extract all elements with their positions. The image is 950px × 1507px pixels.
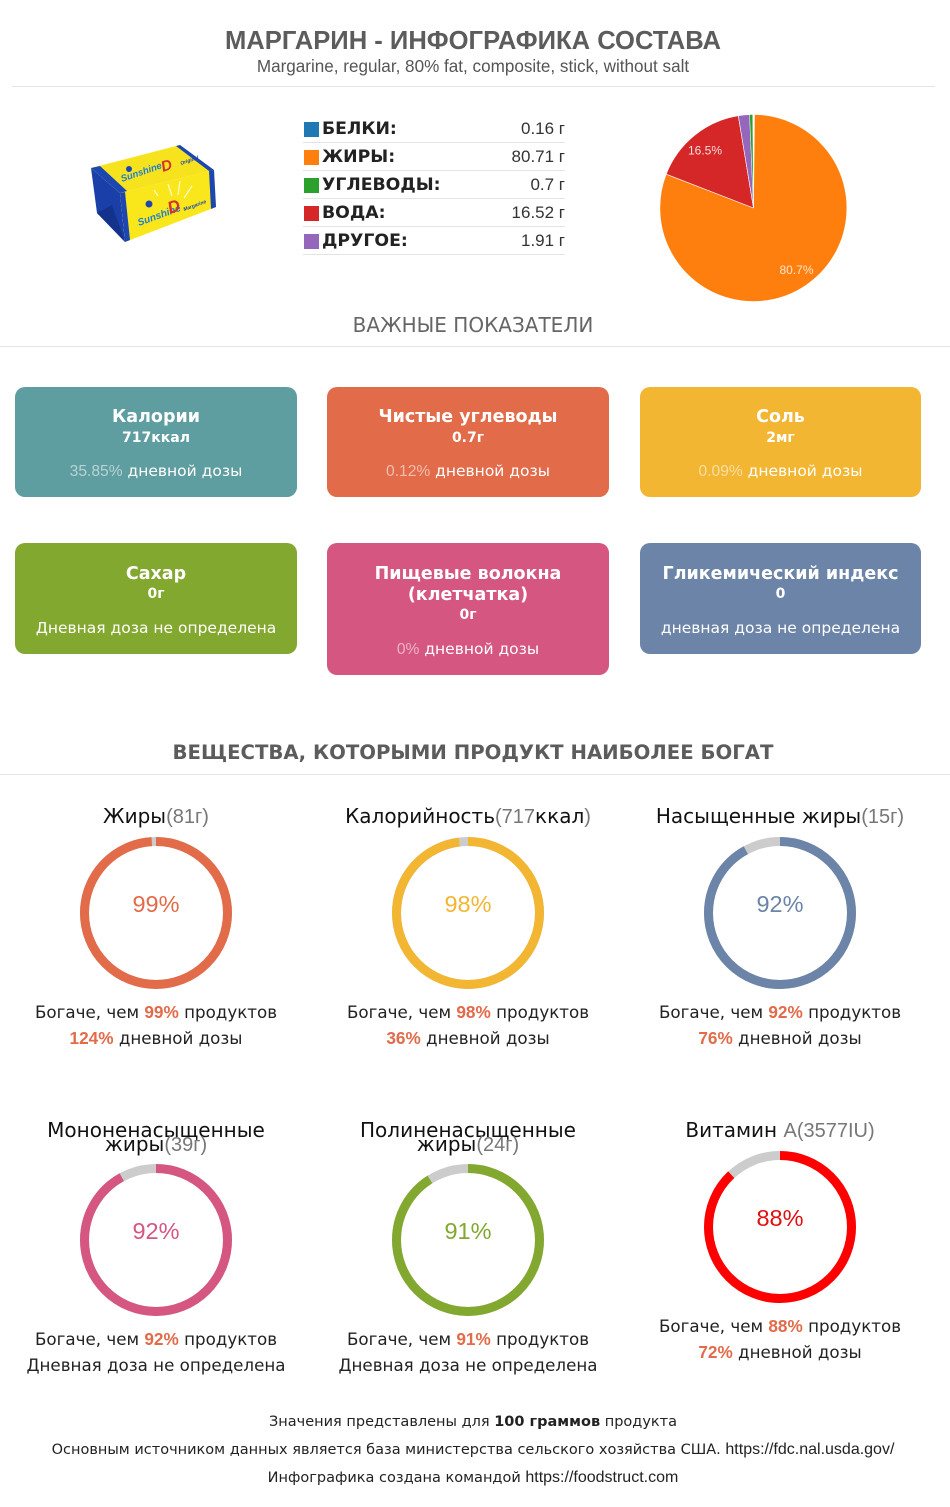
heading: Мононенасыщенные [47,1118,265,1142]
card: salt: 0.09% дневной дозы [699,462,862,480]
card: calories: Калории [112,407,200,427]
card: calories: 35.85% дневной дозы [70,462,242,480]
row: carbs: 0.7 г [530,175,565,194]
ring chart [392,837,544,989]
card: net carbs: 0.7г [452,430,484,446]
card: glycemic index [640,543,921,654]
card: fiber: Пищевые волокна [375,564,561,584]
card: fiber: 0% дневной дозы [397,640,539,658]
panel: fats [35,804,277,1048]
row: fat: ЖИРЫ: [322,147,395,167]
ring chart [704,1151,856,1303]
card: sugar: Дневная доза не определена [36,619,276,637]
footer note: credit: Инфографика создана командой https://foodstruct.com [268,1469,678,1486]
card: glycemic index: Гликемический индекс [663,564,898,584]
percent: 92% [132,1218,180,1244]
row: protein [303,115,565,143]
card: fiber: 0г [459,607,477,623]
percent: 91% [444,1218,492,1244]
percent: 88% [756,1205,804,1231]
row: water [303,199,565,227]
heading: Насыщенные жиры(15г) [656,804,904,828]
row: other [303,227,565,255]
heading: Калорийность(717ккал) [345,804,591,828]
heading: key indicators: ВАЖНЫЕ ПОКАЗАТЕЛИ [353,313,593,337]
rank: Богаче, чем 91% продуктов [347,1329,589,1349]
row: water: ВОДА: [322,203,386,223]
card: net carbs [327,387,609,497]
row: other: ДРУГОЕ: [322,231,408,251]
daily dose: 76% дневной дозы [698,1028,862,1048]
row: other: 1.91 г [521,231,565,250]
pie chart: 80.7% [779,263,814,277]
heading: richest nutrients: ВЕЩЕСТВА, КОТОРЫМИ ПРОДУКТ НАИБОЛЕЕ БОГАТ [173,741,773,764]
table: composition [303,119,565,255]
card: salt: Соль [756,407,805,427]
heading: Полиненасыщенные [360,1118,576,1142]
card: salt: 2мг [766,430,795,446]
row: water: 16.52 г [512,203,565,222]
panel: saturated fats [656,804,904,1048]
heading: жиры(39г) [105,1132,207,1156]
card: glycemic index: 0 [776,586,785,602]
icon: margarine package: Margarine [183,199,207,213]
daily dose: 72% дневной дозы [698,1342,862,1362]
row: fat [303,143,565,171]
daily dose: 124% дневной дозы [70,1028,242,1048]
card: sugar: 0г [147,586,165,602]
footer note: source: Основным источником данных является база министерства сельского хозяйства США. https://fdc.nal.usda.gov/ [52,1441,894,1458]
heading: Витамин A(3577IU) [685,1118,875,1142]
panel: monounsaturated fats [26,1118,286,1375]
card: fiber: (клетчатка) [408,585,528,605]
percent: 98% [444,891,492,917]
subtitle: Margarine, regular, 80% fat, composite, stick, without salt [257,57,689,76]
rank: Богаче, чем 92% продуктов [659,1002,901,1022]
card: sugar [15,543,297,654]
percent: 92% [756,891,804,917]
card: salt [640,387,921,497]
heading: Жиры(81г) [103,804,209,828]
daily dose: Дневная доза не определена [338,1355,598,1375]
ring chart [392,1164,544,1316]
icon: margarine package: Sunshine [119,160,164,185]
ring chart [704,837,856,989]
icon: margarine package: D [165,196,183,218]
rank: Богаче, чем 92% продуктов [35,1329,277,1349]
row: protein: БЕЛКИ: [322,119,397,139]
ring chart [80,837,232,989]
panel: calories [345,804,591,1048]
daily dose: Дневная доза не определена [26,1355,286,1375]
icon: margarine package: D [159,156,175,176]
icon: margarine package [91,145,216,242]
card: calories [15,387,297,497]
row: carbs: УГЛЕВОДЫ: [322,175,441,195]
row: fat: 80.71 г [512,147,565,166]
row: carbs [303,171,565,199]
pie chart [660,114,847,302]
percent: 99% [132,891,180,917]
panel: vitamin A [659,1118,901,1362]
icon: margarine package: Sunshine [136,203,183,229]
row: protein: 0.16 г [521,119,565,138]
pie chart: 16.5% [688,144,722,158]
card: net carbs: 0.12% дневной дозы [386,462,550,480]
footer note: values: Значения представлены для 100 граммов продукта [269,1414,677,1430]
ring chart [80,1164,232,1316]
heading [360,1118,576,1156]
rank: Богаче, чем 98% продуктов [347,1002,589,1022]
rank: Богаче, чем 88% продуктов [659,1316,901,1336]
card: sugar: Сахар [126,564,186,584]
panel: polyunsaturated fats [338,1118,598,1375]
icon: margarine package: Original [180,155,200,167]
card: calories: 717ккал [122,430,190,446]
rank: Богаче, чем 99% продуктов [35,1002,277,1022]
card: net carbs: Чистые углеводы [378,407,558,427]
daily dose: 36% дневной дозы [386,1028,550,1048]
card: glycemic index: дневная доза не определена [661,619,900,637]
card: fiber [327,543,609,675]
heading [47,1118,265,1156]
heading: жиры(24г) [417,1132,519,1156]
title: МАРГАРИН - ИНФОГРАФИКА СОСТАВА [225,27,721,55]
